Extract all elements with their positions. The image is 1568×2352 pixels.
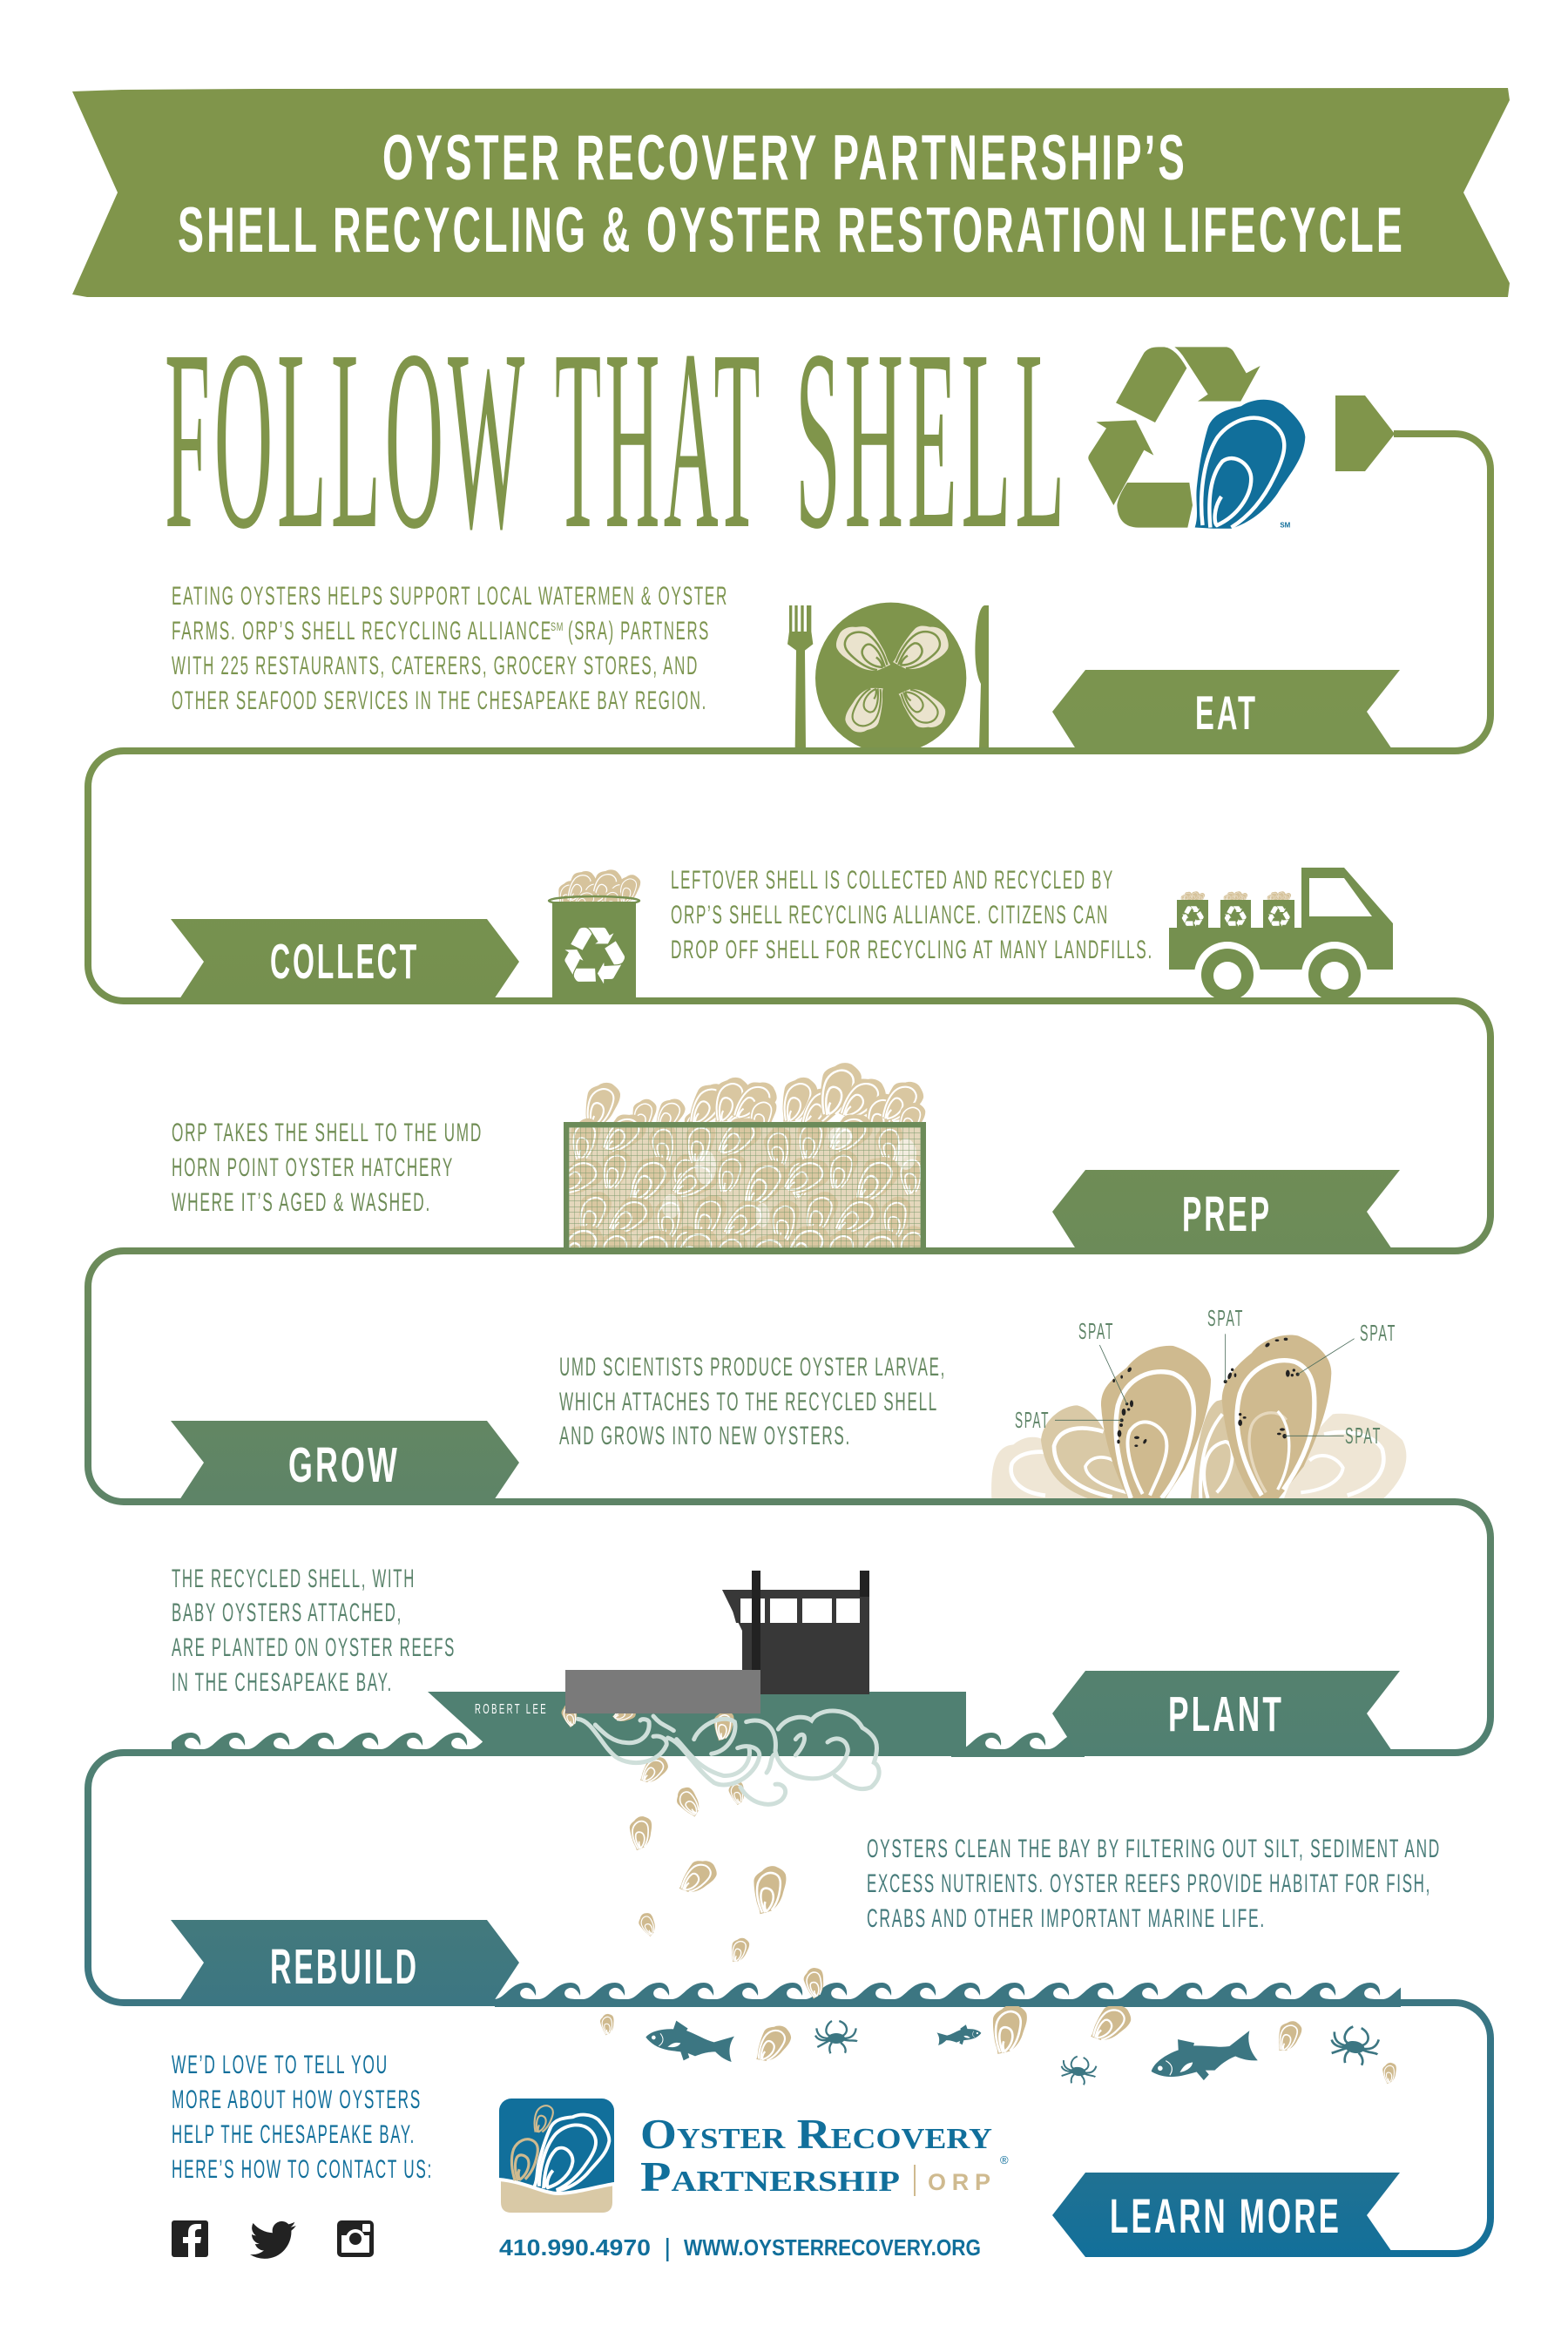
text: prep: [172, 1119, 483, 1217]
ribbon: collect: [171, 919, 519, 1004]
icon: twitter: [250, 2221, 296, 2259]
ribbon: plant: PLANT: [1168, 1686, 1284, 1742]
spat labels: SPAT: [1015, 1407, 1050, 1433]
hull: [428, 1692, 966, 1753]
spat labels: [1015, 1305, 1396, 1449]
logo: oyster recovery partnership: [499, 2099, 1009, 2214]
icon: recycling oyster logo: [1088, 347, 1305, 530]
text: eat: OTHER SEAFOOD SERVICES IN THE CHESAPEAKE BAY REGION.: [172, 686, 707, 715]
text: prep: HORN POINT OYSTER HATCHERY: [172, 1153, 454, 1182]
spat labels: SPAT: [1078, 1318, 1114, 1344]
text: rebuild: CRABS AND OTHER IMPORTANT MARINE LIFE.: [867, 1904, 1266, 1933]
spat labels: SPAT: [1360, 1320, 1396, 1346]
oysters behind the path line: [986, 2000, 1134, 2054]
title banner: [72, 88, 1510, 297]
winding path line: [88, 434, 1490, 2254]
rebuild waves: [486, 1983, 1424, 2007]
start tab of path: [1335, 395, 1395, 471]
ribbon: grow: GROW: [288, 1437, 400, 1493]
falling oysters: [558, 1701, 1402, 2084]
boat: ROBERT LEE: [475, 1702, 548, 1717]
cabin: [722, 1590, 869, 1694]
text: contact: WE’D LOVE TO TELL YOU: [172, 2051, 389, 2079]
text: grow: [559, 1353, 946, 1450]
icon: instagram: [337, 2220, 374, 2257]
ribbon: prep: PREP: [1182, 1186, 1272, 1242]
icon: facebook: [172, 2220, 208, 2257]
ribbon: learn more: LEARN MORE: [1110, 2188, 1342, 2243]
text: eat: [172, 582, 728, 715]
text: plant: [172, 1565, 456, 1697]
text: eat: EATING OYSTERS HELPS SUPPORT LOCAL WATERMEN & OYSTER: [172, 582, 728, 611]
text: prep: ORP TAKES THE SHELL TO THE UMD: [172, 1119, 483, 1147]
text: collect: ORP’S SHELL RECYCLING ALLIANCE. CITIZENS CAN: [671, 901, 1109, 929]
boat grey deck box and wake: [565, 1670, 879, 1804]
text: collect: LEFTOVER SHELL IS COLLECTED AND RECYCLED BY: [671, 866, 1114, 895]
text: plant: BABY OYSTERS ATTACHED,: [172, 1598, 402, 1627]
ribbon: eat: EAT: [1195, 686, 1258, 740]
text: contact: [172, 2051, 433, 2184]
logo: oyster recovery partnership: ®: [1000, 2153, 1009, 2166]
ribbon: learn more: [1052, 2173, 1400, 2257]
ribbon: plant: [1052, 1671, 1400, 1756]
logo: oyster recovery partnership: Oyster Recovery: [640, 2110, 992, 2158]
text: grow: WHICH ATTACHES TO THE RECYCLED SHELL: [559, 1388, 938, 1416]
ribbon: rebuild: [171, 1920, 519, 2006]
text: eat: SM: [551, 619, 564, 633]
text: prep: WHERE IT’S AGED & WASHED.: [172, 1188, 431, 1217]
heading: follow that shell: THAT: [555, 297, 764, 583]
ribbon: collect: COLLECT: [270, 934, 419, 990]
text: contact: HELP THE CHESAPEAKE BAY.: [172, 2120, 416, 2149]
ribbon: eat: [1052, 670, 1400, 754]
icon: plate with oysters, fork and knife: [787, 603, 989, 754]
contact details: WWW.OYSTERRECOVERY.ORG: [684, 2234, 981, 2261]
text: collect: [671, 866, 1153, 964]
ribbon: rebuild: REBUILD: [270, 1939, 419, 1995]
text: rebuild: [867, 1835, 1441, 1933]
icon: recycling oyster logo: SM: [1280, 522, 1291, 530]
text: collect: DROP OFF SHELL FOR RECYCLING AT MANY LANDFILLS.: [671, 936, 1153, 964]
spat labels: SPAT: [1345, 1423, 1382, 1449]
contact details: 410.990.4970: [499, 2234, 651, 2261]
spat labels: SPAT: [1207, 1305, 1244, 1331]
text: eat: WITH 225 RESTAURANTS, CATERERS, GROCERY STORES, AND: [172, 652, 699, 680]
logo: oyster recovery partnership: ORP: [928, 2169, 990, 2195]
ribbon: prep: [1052, 1170, 1400, 1254]
text: plant: IN THE CHESAPEAKE BAY.: [172, 1668, 393, 1697]
sea life: [645, 2013, 1382, 2099]
icon: oyster cluster with spat: [991, 1334, 1406, 1500]
ribbon: grow: [171, 1421, 519, 1505]
text: plant: ARE PLANTED ON OYSTER REEFS: [172, 1633, 456, 1662]
heading: follow that shell: FOLLOW: [165, 297, 529, 583]
text: grow: AND GROWS INTO NEW OYSTERS.: [559, 1422, 851, 1450]
waves beside the boat: [151, 1733, 1090, 1757]
icon: truck with bins: [1169, 868, 1393, 1008]
text: contact: HERE’S HOW TO CONTACT US:: [172, 2155, 433, 2184]
text: eat: FARMS. ORP’S SHELL RECYCLING ALLIANCE: [172, 617, 552, 645]
contact details: [499, 2234, 981, 2261]
text: grow: UMD SCIENTISTS PRODUCE OYSTER LARVAE,: [559, 1353, 946, 1382]
logo: oyster recovery partnership: Partnership: [640, 2153, 900, 2200]
boat: [428, 1571, 966, 1753]
text: plant: THE RECYCLED SHELL, WITH: [172, 1565, 416, 1593]
text: eat: (SRA) PARTNERS: [568, 617, 710, 645]
icon: shell basket: [564, 1063, 926, 1247]
icon: recycling bin with shells: [549, 868, 643, 1001]
text: contact: MORE ABOUT HOW OYSTERS: [172, 2085, 422, 2114]
